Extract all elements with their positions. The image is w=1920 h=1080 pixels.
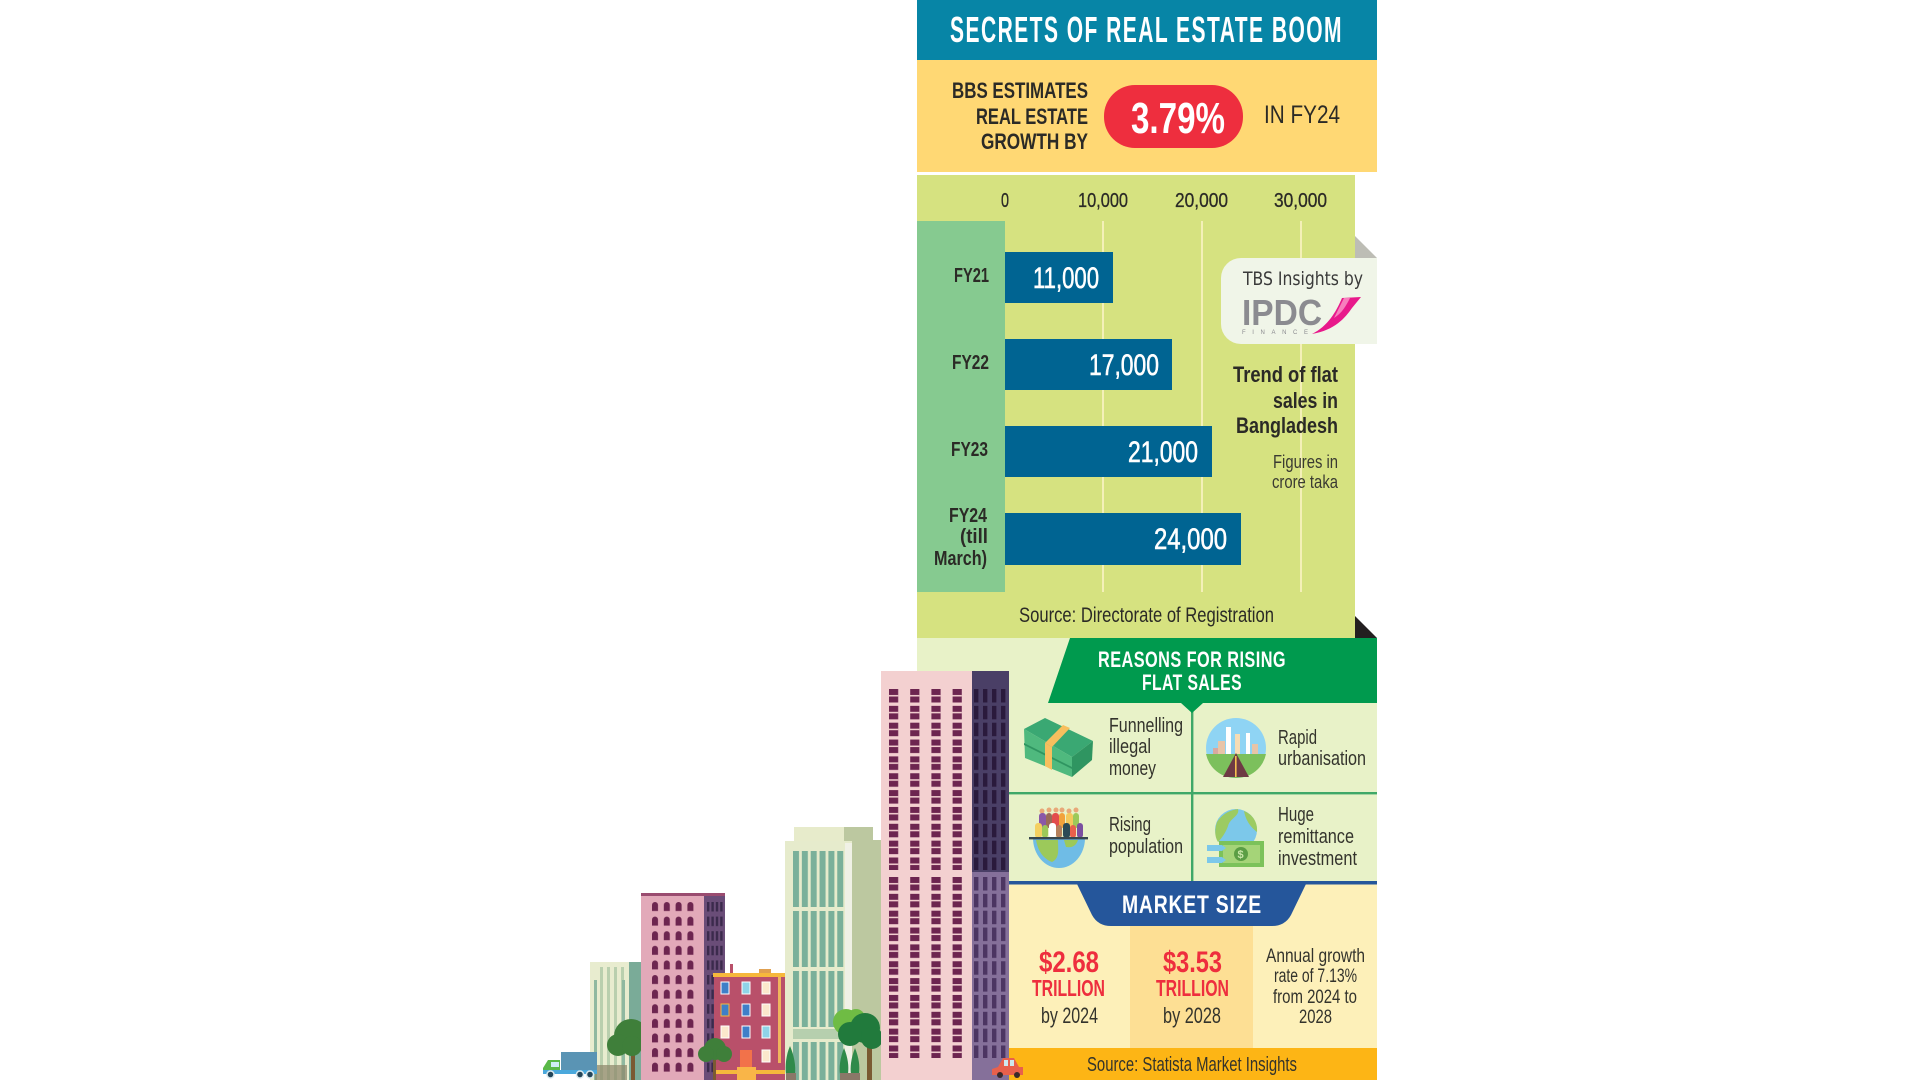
- bar: FY21: 11,000: [1033, 262, 1099, 295]
- text: funnelling illegal money: [1109, 715, 1183, 780]
- brick building: [713, 964, 785, 1080]
- panel: TBS Insights by IPDC badge: IPDC: [1242, 292, 1322, 333]
- unit note: Figures in: [1273, 452, 1338, 472]
- text: rising population: population: [1109, 836, 1183, 858]
- axis labels: 20,000: [1175, 190, 1228, 212]
- title banner: [917, 0, 1377, 60]
- chart title: Bangladesh: [1236, 413, 1338, 438]
- text: rising population: [1109, 814, 1183, 858]
- panel: BBS growth estimate: [917, 60, 1377, 172]
- left pale building: [590, 962, 642, 1080]
- stat: annual growth rate: Annual growth: [1266, 946, 1365, 967]
- panel: flat sales bar chart: [917, 175, 1355, 638]
- heading: REASONS FOR RISING: [1098, 647, 1286, 672]
- icon: globe with people: [1029, 808, 1088, 868]
- icon: globe with banknote: [1207, 809, 1264, 867]
- market source bar: [1009, 1048, 1377, 1080]
- text: rapid urbanisation: [1278, 727, 1366, 770]
- stat: 2028 market size: TRILLION: [1156, 975, 1229, 1001]
- panel: BBS growth estimate: 3.79%: [1131, 94, 1225, 143]
- unit note: [1272, 452, 1339, 492]
- pink mid-rise: [641, 893, 725, 1080]
- heading: FLAT SALES: [1142, 670, 1242, 695]
- text: funnelling illegal money: illegal: [1109, 736, 1151, 758]
- stat: 2024 market size: TRILLION: [1032, 975, 1105, 1001]
- text: huge remittance investment: Huge: [1278, 804, 1314, 826]
- panel: BBS growth estimate: BBS ESTIMATES: [952, 78, 1088, 103]
- panel: TBS Insights by IPDC badge: TBS Insights by: [1242, 268, 1363, 290]
- unit note: crore taka: [1272, 472, 1339, 492]
- panel: BBS growth estimate: IN FY24: [1264, 101, 1340, 129]
- stat: 2028 market size: by 2028: [1163, 1003, 1221, 1028]
- panel: BBS growth estimate: GROWTH BY: [981, 129, 1088, 154]
- bar: FY22: [952, 339, 1172, 390]
- text: huge remittance investment: remittance: [1278, 826, 1354, 848]
- text: funnelling illegal money: money: [1109, 758, 1156, 780]
- panel: BBS growth estimate: REAL ESTATE: [976, 104, 1088, 129]
- bar: FY22: FY22: [952, 352, 989, 374]
- axis labels: 10,000: [1078, 190, 1128, 212]
- text: rising population: Rising: [1109, 814, 1151, 836]
- icon: IPDC swoosh: [1312, 297, 1361, 334]
- trees: [698, 1009, 883, 1080]
- bar: FY24: 24,000: [1154, 523, 1227, 556]
- stat: annual growth rate: [1266, 946, 1365, 1028]
- text: funnelling illegal money: Funnelling: [1109, 715, 1183, 737]
- text: rapid urbanisation: Rapid: [1278, 727, 1317, 749]
- axis labels: [1001, 190, 1327, 212]
- illustration: city skyline: [543, 671, 1023, 1080]
- bar: FY24: (till: [960, 526, 988, 548]
- chart title: [1233, 362, 1339, 438]
- left tree: [607, 1019, 648, 1080]
- chart title: sales in: [1273, 388, 1338, 413]
- axis labels: 30,000: [1274, 190, 1327, 212]
- panel: reasons for rising flat sales: [917, 638, 1377, 881]
- icon: money stack: [1024, 718, 1093, 777]
- black fold: [1355, 616, 1377, 638]
- bar: FY24: March): [934, 548, 987, 570]
- bar: FY23: FY23: [951, 439, 988, 461]
- bar: FY23: [951, 426, 1212, 477]
- market source bar: Source: Statista Market Insights: [1087, 1054, 1297, 1076]
- title banner: SECRETS OF REAL ESTATE BOOM: [950, 9, 1343, 50]
- stat: annual growth rate: rate of 7.13%: [1274, 966, 1357, 987]
- stat: annual growth rate: from 2024 to: [1273, 987, 1357, 1008]
- stat: 2028 market size: [1156, 946, 1229, 1028]
- bar: FY24: [934, 505, 1241, 570]
- panel: TBS Insights by IPDC badge: [1221, 236, 1377, 344]
- stat: annual growth rate: 2028: [1299, 1007, 1332, 1028]
- text: rapid urbanisation: urbanisation: [1278, 748, 1366, 770]
- bar: FY24: FY24: [949, 505, 988, 527]
- stat: 2024 market size: $2.68: [1039, 946, 1099, 979]
- stat: 2024 market size: [1032, 946, 1105, 1028]
- text: huge remittance investment: [1278, 804, 1357, 870]
- heading: [1048, 638, 1377, 713]
- heading: [1077, 884, 1306, 926]
- icon: city road: [1206, 718, 1266, 778]
- chart title: Trend of flat: [1233, 362, 1339, 387]
- text: huge remittance investment: investment: [1278, 848, 1357, 870]
- bar: FY21: [954, 252, 1113, 303]
- stat: 2028 market size: $3.53: [1163, 946, 1222, 979]
- icon: truck: [543, 1052, 597, 1078]
- axis labels: 0: [1001, 190, 1009, 212]
- chart source: Source: Directorate of Registration: [1019, 604, 1274, 627]
- green tower: [785, 827, 881, 1080]
- panel: TBS Insights by IPDC badge: FINANCE: [1242, 330, 1308, 336]
- stat: 2024 market size: by 2024: [1041, 1003, 1098, 1028]
- heading: MARKET SIZE: [1122, 891, 1262, 919]
- tall pink tower: [881, 671, 1009, 1080]
- panel: market size: [1009, 881, 1377, 1048]
- bar: FY21: FY21: [954, 265, 989, 287]
- icon: globe with banknote: $: [1238, 849, 1244, 861]
- icon: car: [992, 1058, 1023, 1078]
- bar: FY23: 21,000: [1128, 436, 1198, 469]
- bar: FY22: 17,000: [1089, 349, 1159, 382]
